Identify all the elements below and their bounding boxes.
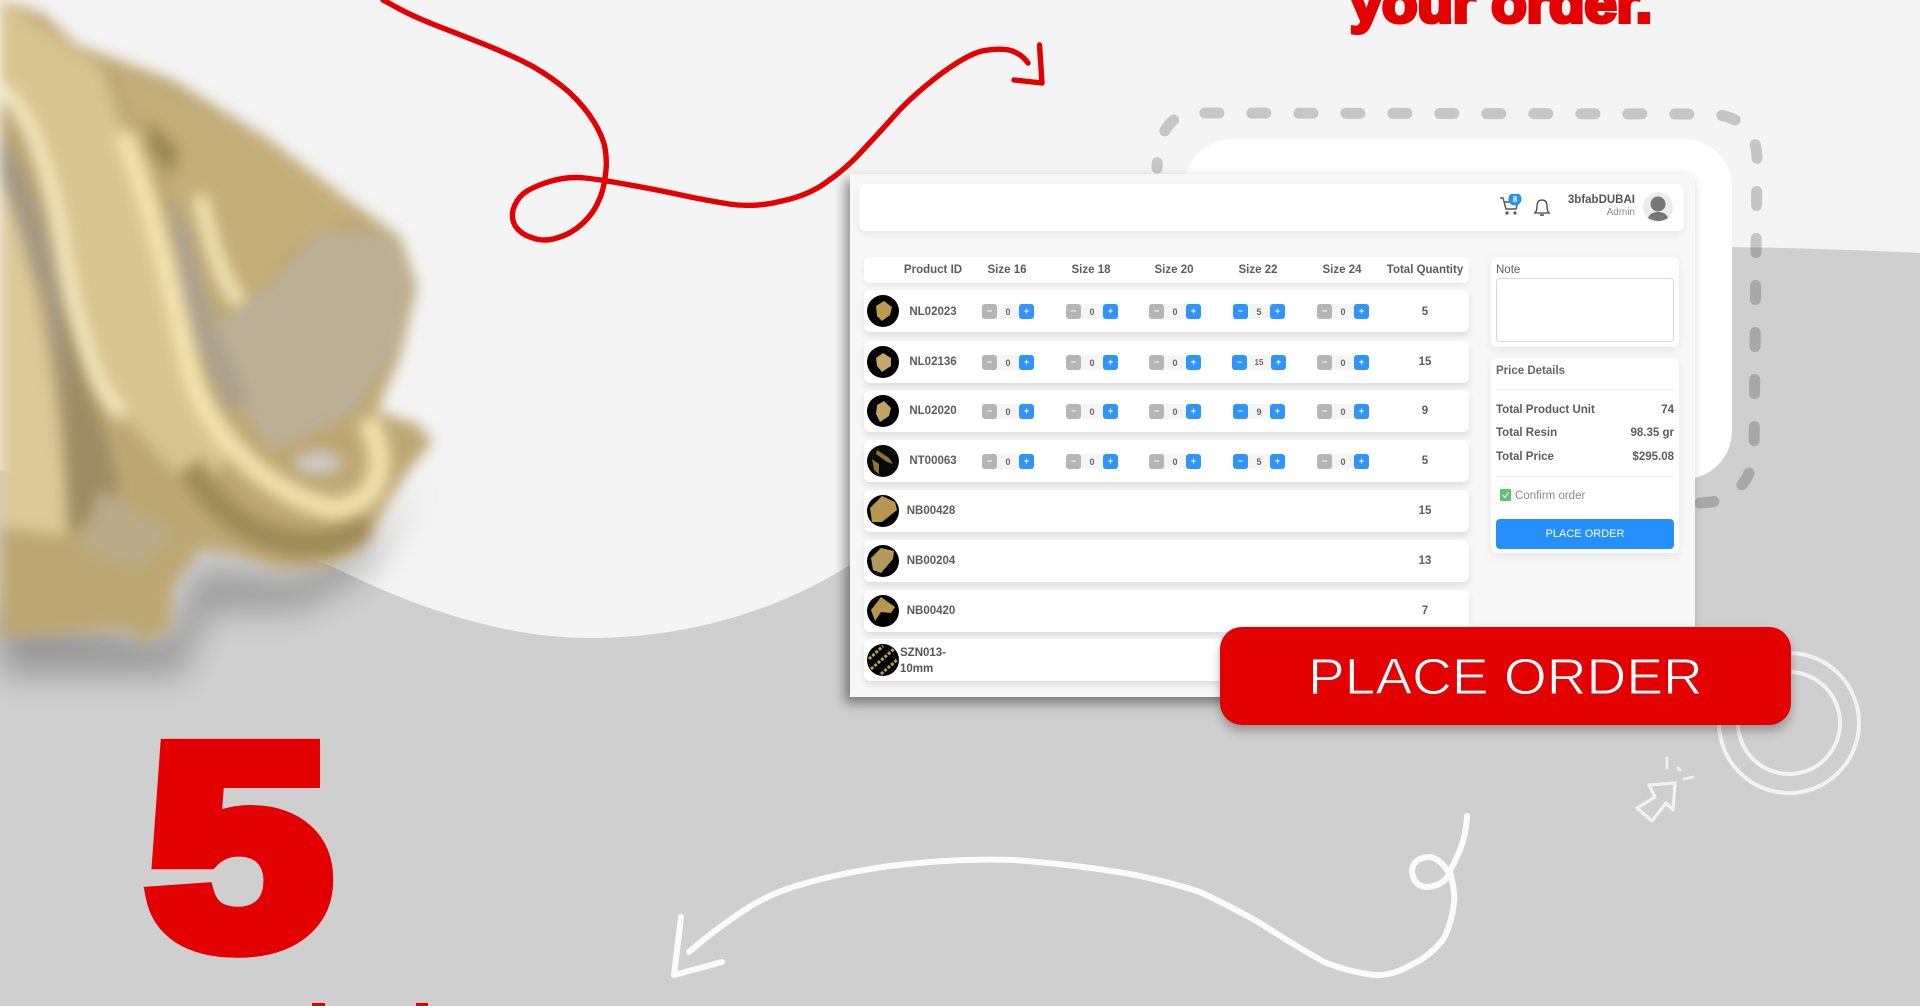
table row NT00063: 5 bbox=[1422, 454, 1428, 466]
table header: Size 16 bbox=[988, 264, 1026, 276]
value price: $295.08 bbox=[1632, 451, 1674, 463]
big step number 5: 5 bbox=[147, 688, 331, 1006]
table row NL02136: 0 bbox=[1089, 358, 1094, 368]
table row NL02020: 9 bbox=[1422, 405, 1428, 417]
table row NB00204 bbox=[864, 540, 1469, 582]
table row NL02020: + bbox=[1191, 406, 1196, 416]
price details card bbox=[1491, 358, 1679, 553]
icon: checkbox bbox=[1500, 489, 1511, 501]
note card bbox=[1491, 257, 1679, 347]
table row NT00063 bbox=[864, 440, 1469, 482]
user name: 3bfabDUBAI bbox=[1568, 194, 1635, 206]
table row NL02136: − bbox=[1237, 356, 1242, 366]
table row NL02136: + bbox=[1191, 356, 1196, 366]
table row NL02020 bbox=[864, 390, 1469, 432]
table row NT00063: − bbox=[1071, 456, 1076, 466]
table row NL02020: 0 bbox=[1005, 407, 1010, 417]
table row NT00063: + bbox=[1024, 456, 1029, 466]
table row NT00063: 0 bbox=[1172, 456, 1178, 466]
table row NB00428: NB00428 bbox=[907, 505, 955, 517]
table row NL02136: 15 bbox=[1419, 356, 1431, 368]
table header: Size 20 bbox=[1154, 264, 1194, 276]
gold jewellery photo, blurred bbox=[0, 0, 440, 691]
table row NL02023: 0 bbox=[1005, 307, 1010, 317]
table row NL02136: 15 bbox=[1255, 358, 1263, 366]
value resin: 98.35 gr bbox=[1631, 427, 1674, 439]
table row NL02136: 0 bbox=[1172, 358, 1178, 368]
value 74: 74 bbox=[1661, 404, 1674, 416]
table row NL02020: + bbox=[1024, 406, 1029, 416]
table row NL02023: 0 bbox=[1172, 307, 1178, 317]
table header: Product ID bbox=[904, 264, 962, 276]
table row NL02020: − bbox=[1071, 406, 1076, 416]
table row NL02136: − bbox=[1322, 356, 1327, 366]
table row NT00063: + bbox=[1191, 456, 1196, 466]
table header: Size 18 bbox=[1072, 264, 1110, 276]
icon: cart with badge: 8 bbox=[1513, 195, 1518, 204]
table row NT00063: 5 bbox=[1256, 456, 1262, 466]
table row NL02023: 5 bbox=[1256, 307, 1262, 317]
table row NB00420 bbox=[864, 590, 1469, 632]
confirm order: Confirm order bbox=[1515, 490, 1585, 502]
note label: Note bbox=[1496, 264, 1520, 276]
table row NB00204: 13 bbox=[1419, 555, 1431, 567]
table row NT00063: + bbox=[1275, 456, 1280, 466]
table row NL02136: + bbox=[1359, 356, 1364, 366]
panel: dashboard screenshot bbox=[850, 174, 1695, 697]
note textarea bbox=[1496, 278, 1674, 342]
icon: bell bbox=[1534, 199, 1550, 216]
table row NB00428 bbox=[864, 490, 1469, 532]
table row NL02023: − bbox=[987, 306, 992, 316]
table header: Size 22 bbox=[1238, 264, 1278, 276]
table row NL02020: − bbox=[1238, 406, 1243, 416]
table row SZN013-10mm: 10mm bbox=[900, 662, 933, 674]
table row NT00063: − bbox=[1238, 456, 1243, 466]
table row NL02020: NL02020 bbox=[909, 405, 957, 417]
table row SZN013-10mm: SZN013- bbox=[900, 647, 946, 659]
table row NL02136: + bbox=[1108, 356, 1113, 366]
table row NL02020: + bbox=[1359, 406, 1364, 416]
table row NL02020: 0 bbox=[1089, 407, 1094, 417]
small place order button: PLACE ORDER bbox=[1546, 528, 1624, 540]
table row NL02023: − bbox=[1322, 306, 1327, 316]
table row NT00063: − bbox=[987, 456, 992, 466]
table header: Total Quantity bbox=[1387, 264, 1463, 276]
table row NL02136: NL02136 bbox=[909, 356, 957, 368]
table row NT00063: − bbox=[1322, 456, 1327, 466]
table row NL02136: 0 bbox=[1005, 358, 1010, 368]
table row NL02023: + bbox=[1108, 306, 1113, 316]
icon: cart with badge bbox=[1500, 194, 1522, 215]
table row NL02023: − bbox=[1238, 306, 1243, 316]
table row NT00063: NT00063 bbox=[909, 454, 957, 466]
table row NL02023 bbox=[864, 290, 1469, 332]
table row NL02023: + bbox=[1359, 306, 1364, 316]
table row NL02023: + bbox=[1275, 306, 1280, 316]
table row NL02020: − bbox=[1154, 406, 1159, 416]
table row NL02020: − bbox=[1322, 406, 1327, 416]
table row NT00063: 0 bbox=[1340, 456, 1346, 466]
table header: Size 24 bbox=[1322, 264, 1362, 276]
icon: user avatar bbox=[1643, 192, 1673, 222]
table row NB00420: 7 bbox=[1422, 604, 1428, 616]
table row SZN013-10mm bbox=[864, 639, 1469, 681]
button label: PLACE ORDER bbox=[1308, 648, 1703, 705]
table row NL02023: − bbox=[1154, 306, 1159, 316]
table row NL02023: + bbox=[1191, 306, 1196, 316]
table row NL02136: − bbox=[1154, 356, 1159, 366]
table row NT00063: + bbox=[1108, 456, 1113, 466]
total price: Total Price bbox=[1496, 451, 1554, 463]
table row NL02020: + bbox=[1108, 406, 1113, 416]
table row NB00428: 15 bbox=[1419, 505, 1431, 517]
total resin: Total Resin bbox=[1496, 427, 1557, 439]
table row NL02023: 0 bbox=[1089, 307, 1094, 317]
table row NL02136: + bbox=[1024, 356, 1029, 366]
table row NT00063: + bbox=[1359, 456, 1364, 466]
table row NL02023: 0 bbox=[1340, 307, 1346, 317]
table row NL02020: 0 bbox=[1340, 407, 1346, 417]
button: place order bbox=[1220, 627, 1791, 725]
table row NL02136 bbox=[864, 340, 1469, 382]
table row NL02020: − bbox=[987, 406, 992, 416]
table row NL02020: + bbox=[1275, 406, 1280, 416]
table header bbox=[864, 257, 1469, 283]
table row NT00063: 0 bbox=[1089, 456, 1094, 466]
table row NL02136: + bbox=[1276, 356, 1281, 366]
table row NB00420: NB00420 bbox=[907, 604, 955, 616]
table row NT00063: 0 bbox=[1005, 456, 1010, 466]
table row NL02020: 0 bbox=[1172, 407, 1178, 417]
small place order button bbox=[1496, 519, 1674, 549]
table row NL02136: − bbox=[1071, 356, 1076, 366]
table row NL02023: − bbox=[1071, 306, 1076, 316]
table row NL02136: − bbox=[987, 356, 992, 366]
table row NL02023: NL02023 bbox=[909, 306, 957, 318]
table row NL02020: 9 bbox=[1256, 407, 1262, 417]
top bar card bbox=[859, 184, 1684, 231]
total product unit: Total Product Unit bbox=[1496, 404, 1595, 416]
table row NL02023: + bbox=[1024, 306, 1029, 316]
user role: Admin bbox=[1607, 207, 1635, 218]
table row NB00204: NB00204 bbox=[907, 555, 955, 567]
table row NL02136: 0 bbox=[1340, 358, 1346, 368]
table row NT00063: − bbox=[1154, 456, 1159, 466]
table row NL02023: 5 bbox=[1422, 306, 1428, 318]
price heading: Price Details bbox=[1496, 365, 1565, 377]
